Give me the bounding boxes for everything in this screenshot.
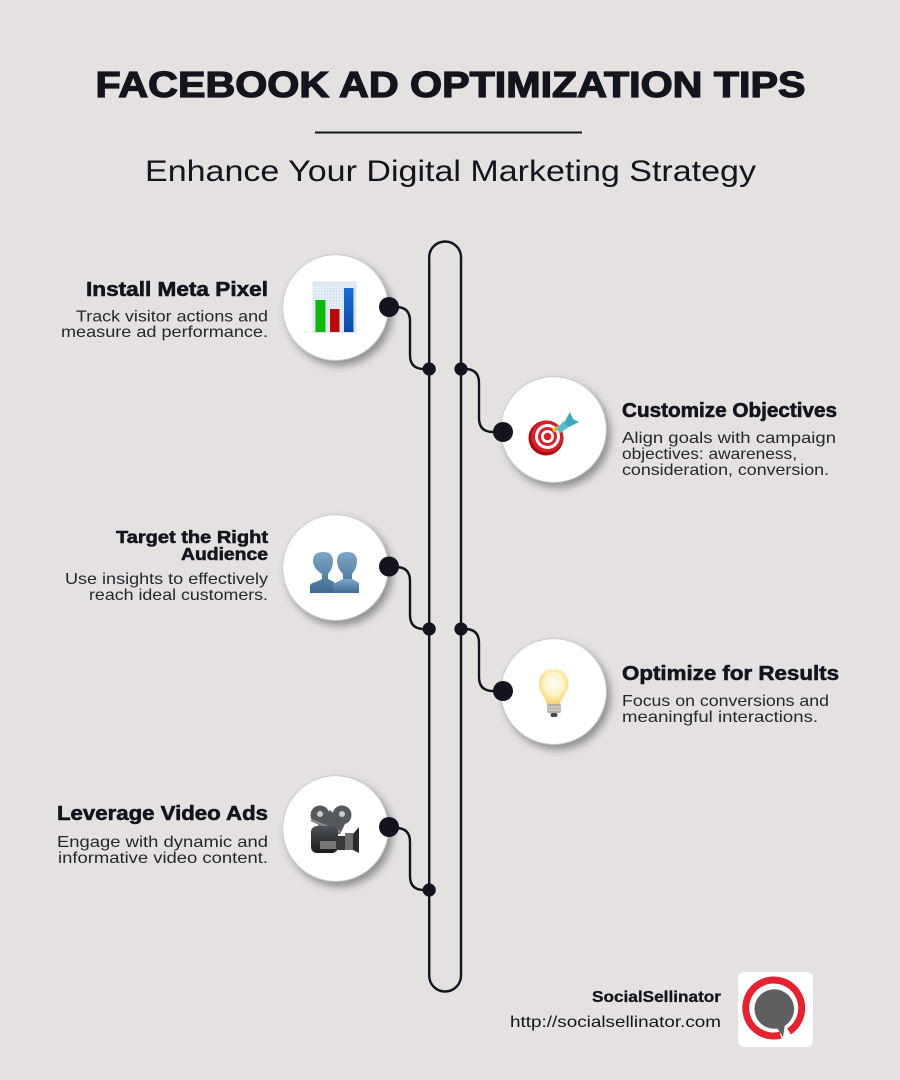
icon: bar chart: [313, 282, 356, 332]
text: customize objectives description: [622, 430, 836, 479]
text: video ads description: Engage with dynamic and: [57, 834, 268, 851]
text: optimize description: Focus on conversions and: [622, 693, 829, 710]
text: audience description: reach ideal customers.: [89, 587, 268, 604]
icon: film camera: [310, 806, 359, 853]
connector dot: [493, 681, 513, 701]
text: video ads description: informative video content.: [58, 850, 268, 867]
brand url: http://socialsellinator.com: [510, 1014, 721, 1031]
connector dot: [379, 817, 399, 837]
subtitle: Enhance Your Digital Marketing Strategy: [145, 155, 756, 188]
text: install meta pixel description: measure ad performance.: [61, 324, 268, 341]
text: video ads description: [57, 834, 268, 867]
connector: [461, 629, 503, 691]
connector dot: [379, 297, 399, 317]
panel: leverage video ads: [57, 776, 429, 890]
heading: target the right audience: Audience: [181, 544, 268, 564]
icon: target with dart: [528, 412, 579, 456]
panel: install meta pixel: [61, 255, 429, 369]
central timeline track: [423, 242, 468, 992]
text: customize objectives description: objectives: awareness,: [622, 446, 797, 463]
heading: optimize for results: Optimize for Results: [622, 663, 839, 685]
text: install meta pixel description: Track visitor actions and: [76, 308, 268, 326]
icon: light bulb: [539, 669, 568, 717]
icon circle: [283, 776, 388, 881]
text: optimize description: meaningful interactions.: [622, 709, 818, 726]
text: audience description: [65, 571, 268, 604]
heading: leverage video ads: Leverage Video Ads: [57, 803, 268, 825]
connector: [461, 369, 503, 432]
text: audience description: Use insights to effectively: [65, 571, 268, 588]
icon circle: [283, 255, 388, 360]
text: install meta pixel description: [61, 308, 268, 341]
text: customize objectives description: consideration, conversion.: [622, 462, 829, 479]
icon circle: [501, 377, 606, 482]
panel: optimize for results: [461, 629, 839, 744]
panel: target the right audience: [65, 515, 429, 629]
connector dot: [493, 422, 513, 442]
icon circle: [283, 515, 388, 620]
title: FACEBOOK AD OPTIMIZATION TIPS: [96, 64, 806, 105]
icon circle: [501, 639, 606, 744]
connector: [389, 307, 429, 369]
panel: customize objectives: [461, 369, 837, 482]
heading: target the right audience: [116, 527, 268, 564]
connector: [389, 567, 429, 629]
brand name: SocialSellinator: [592, 989, 721, 1006]
text: optimize description: [622, 693, 829, 726]
logo: [738, 972, 813, 1047]
icon: two people: [310, 552, 359, 593]
connector: [389, 828, 429, 890]
heading: install meta pixel: Install Meta Pixel: [86, 279, 268, 301]
text: customize objectives description: Align goals with campaign: [622, 430, 836, 447]
heading: target the right audience: Target the Right: [116, 527, 268, 547]
title divider: [315, 132, 582, 134]
heading: customize objectives: Customize Objectives: [622, 400, 837, 422]
connector dot: [379, 556, 399, 576]
footer brand: [510, 972, 813, 1047]
